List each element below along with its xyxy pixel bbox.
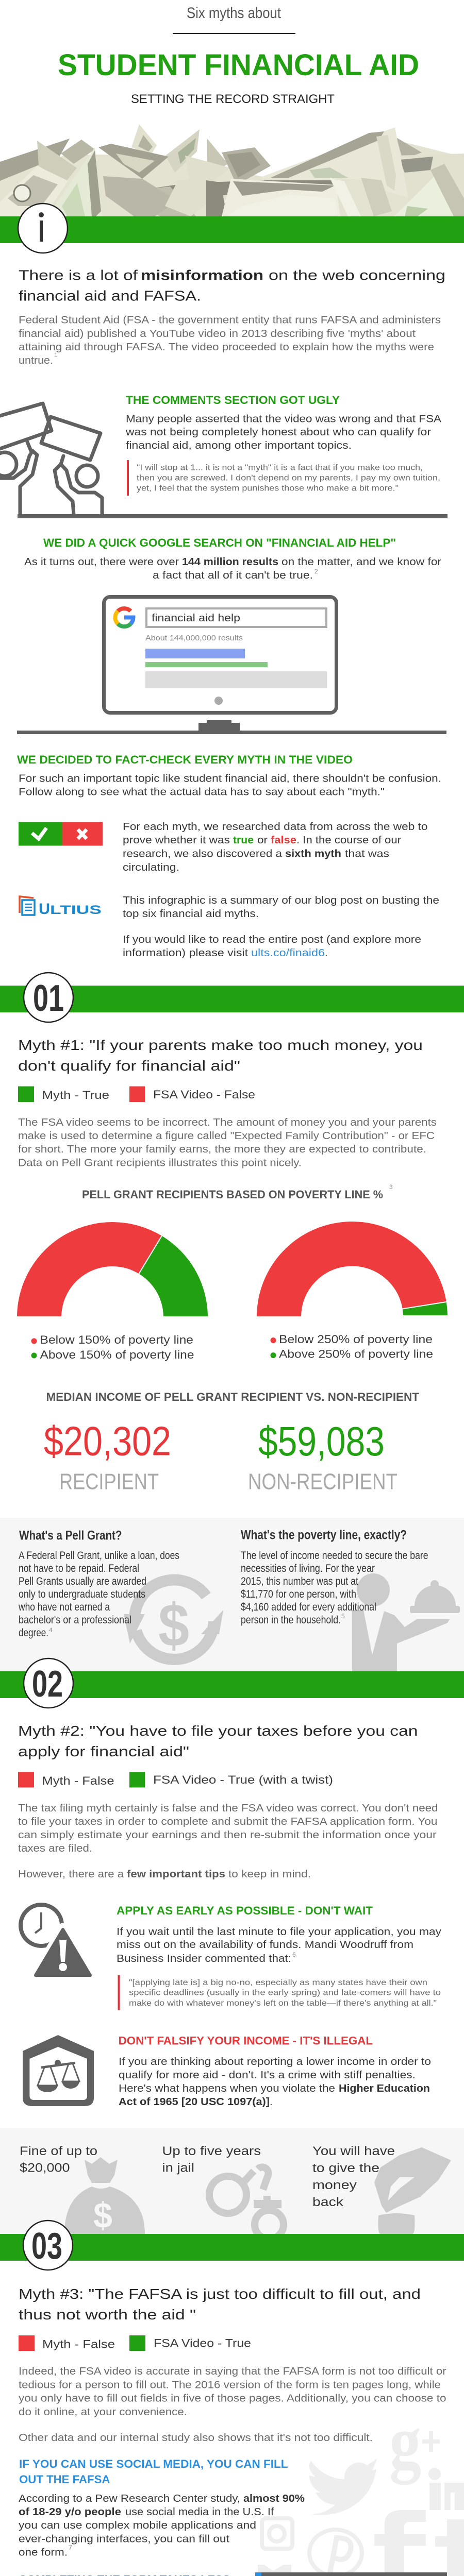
icon: dollar refresh [124,1580,223,1659]
icon: dollar refresh: $ [158,1591,189,1659]
fact-check section [17,753,441,798]
logo: Ultius: U [39,901,50,918]
icon: computer monitor with search results [17,597,446,734]
myth 3 heading: Myth #3: "The FAFSA is just too difficult to fill out, and [19,2286,421,2302]
callout: social media: one form. [19,2547,68,2558]
icon: computer monitor with search results: About 144,000,000 results [145,634,243,642]
median income comparison: NON-RECIPIENT [248,1469,397,1494]
myth 2 paragraph: can simply estimate your earnings and then re-submit the information once your [18,1829,437,1841]
true or false explanation: false [271,835,296,846]
google search section: 144 million results [182,556,278,568]
quote: Business Insider [118,1975,441,2010]
legend: Above 250% of poverty line [279,1348,433,1360]
myth 2 verdict legend: FSA Video - True (with a twist) [153,1773,333,1786]
tip: apply early: If you wait until the last minute to file your application, you may [117,1926,441,1938]
panel: form steps [255,2572,447,2576]
definition: pell grant: who have not earned a [18,1601,110,1613]
callout: social media: According to a Pew Research Center study, [19,2493,240,2504]
legend: Above 150% of poverty line [40,1348,194,1361]
intro paragraph: financial aid) published a YouTube video in 2013 describing five 'myths' about [19,328,416,340]
definition: pell grant: only to undergraduate students [19,1588,145,1600]
legend: Below 250% of poverty line [279,1333,433,1346]
definition: poverty line: 5 [341,1613,345,1620]
panel: definitions [0,1518,464,1671]
logo: Ultius [20,896,102,918]
true or false explanation: sixth myth [285,848,341,859]
tip: apply early: APPLY AS EARLY AS POSSIBLE - DON'T WAIT [117,1904,373,1917]
band: myth 2: 02 [32,1664,63,1705]
chart: below and above 250 percent [257,1222,448,1360]
definition: poverty line: person in the household. [241,1614,341,1626]
myth 1 heading: Myth #1: "If your parents make too much money, you [18,1037,423,1053]
comments section: was not being completely honest about who can qualify for [125,427,431,438]
median income comparison: $59,083 [258,1418,385,1464]
blog post note [123,895,439,959]
true or false explanation: true [233,835,254,846]
blog post note: top six financial aid myths. [123,908,259,920]
definition: pell grant: Pell Grants usually are awarded [19,1575,146,1587]
definition: pell grant: not have to be repaid. Federal [19,1563,139,1574]
definition: pell grant: What's a Pell Grant? [19,1528,122,1543]
quote: Business Insider: "[applying late is] a big no-no, especially as many states have their own [129,1978,427,1987]
myth 3 verdict legend: Myth - False [42,2338,115,2350]
tip: apply early: miss out on the availability of funds. Mandi Woodruff from [117,1939,413,1951]
intro paragraph: untrue. [19,355,53,366]
myth 1 heading: don't qualify for financial aid" [18,1058,240,1074]
comments section: Many people asserted that the video was wrong and that FSA [126,413,442,425]
true or false explanation: that was [345,848,389,859]
icon: computer monitor with search results: financial aid help [152,613,240,624]
true or false explanation: circulating. [123,862,179,873]
legend: Below 150% of poverty line [40,1333,193,1346]
quote: comment [127,460,440,496]
myth 2 paragraph: However, there are a [18,1869,124,1880]
myth 2 verdict legend: Myth - False [42,1774,114,1787]
intro heading: There is a lot of [19,267,138,283]
legend [31,1333,194,1361]
true or false explanation: . In the course of our [296,835,401,846]
quote: Business Insider: make do with whatever money's left on the table—if there's anything at all." [129,1999,437,2008]
blog post note: If you would like to read the entire post (and explore more [123,934,421,945]
callout: social media [19,2458,305,2558]
icon: handcuffs [209,2167,284,2239]
icon: clock and warning triangle [21,1905,93,1977]
penalty: repay: to give the [312,2161,379,2175]
myth 3 verdict legend [19,2335,251,2351]
illustration: pile of dollar bills [0,124,464,216]
definition: poverty line: $11,770 for one person, with [241,1588,356,1600]
band: myth 3: 03 [31,2226,62,2267]
myth 2 paragraph: to keep in mind. [228,1869,311,1880]
tip: don't falsify income: Act of 1965 [20 USC 1097(a)] [119,2096,270,2108]
band: intro [0,216,464,243]
header [58,5,419,106]
myth 3 paragraph [19,2366,446,2444]
quote: comment: yet, I feel that the system punishes those who make a bit more." [137,484,399,493]
callout: social media: 7 [69,2544,72,2551]
myth 1 verdict legend [18,1086,255,1102]
myth 3 paragraph: you only have to fill out fields in five of those pages. Additionally, you can choose to [19,2393,446,2404]
badge: info [18,204,68,253]
tip: don't falsify income: If you are thinking about reporting a lower income in order to [119,2056,431,2067]
intro heading: misinformation [141,267,263,283]
icon: courthouse shield with scales [23,2035,94,2106]
definition: poverty line: What's the poverty line, exactly? [241,1528,407,1543]
subtitle: SETTING THE RECORD STRAIGHT [131,92,335,106]
true or false explanation: or [257,835,268,846]
penalty: jail [162,2144,261,2175]
logo: Ultius: LTIUS [50,903,102,917]
definition: poverty line [241,1528,428,1626]
chart title: poverty line: 3 [389,1183,393,1191]
icon: true and false boxes [19,822,103,846]
callout: social media: almost 90% [243,2493,305,2504]
icon: google logo [115,608,134,626]
blog post note: . [325,947,328,959]
intro paragraph: attaining aid through FAFSA. The video proceeded to explain how the myths were [19,342,434,353]
myth 3 heading: thus not worth the aid " [19,2307,196,2323]
myth 3 paragraph: Indeed, the FSA video is accurate in saying that the FAFSA form is not too difficult or [19,2366,446,2377]
icons: social media watermark: g [389,2399,421,2485]
quote: comment: then you are screwed. I don't depend on my parents, I pay my own tuition, [137,474,440,482]
intro heading [19,267,445,304]
fact-check section: WE DECIDED TO FACT-CHECK EVERY MYTH IN THE VIDEO [17,753,353,766]
myth 2 paragraph: The tax filing myth certainly is false and the FSA video was correct. You don't need [18,1803,438,1814]
myth 3 paragraph: tedious for a person to fill out. The 2016 version of the form is ten pages long, while [19,2379,441,2391]
penalty: repay [312,2144,395,2209]
tip: don't falsify income: Here's what happens when you violate the [119,2083,335,2094]
google search section: 2 [314,568,318,575]
penalty: fine [20,2144,97,2175]
band: myth 2 [0,1658,464,1708]
panel: penalties [0,2128,464,2239]
google search section [24,536,441,581]
median income comparison: MEDIAN INCOME OF PELL GRANT RECIPIENT VS. NON-RECIPIENT [46,1391,420,1403]
tip: apply early: 6 [292,1951,296,1958]
tip: apply early: Business Insider commented that: [117,1953,291,1964]
blog post note: information) please visit [123,947,248,959]
chart title: poverty line: PELL GRANT RECIPIENTS BASED ON POVERTY LINE % [82,1188,383,1201]
fact-check section: For such an important topic like student financial aid, there shouldn't be confusion. [19,773,441,784]
google search section: WE DID A QUICK GOOGLE SEARCH ON "FINANCIAL AID HELP" [43,536,396,549]
myth 1 paragraph: The FSA video seems to be incorrect. The amount of money you and your parents [18,1117,437,1128]
callout: social media: IF YOU CAN USE SOCIAL MEDIA, YOU CAN FILL [19,2458,288,2470]
definition: pell grant [18,1528,179,1639]
penalty: repay: back [312,2195,344,2209]
definition: pell grant: A Federal Pell Grant, unlike a loan, does [19,1550,179,1562]
title: STUDENT FINANCIAL AID [58,48,419,82]
icon: protesters holding signs [0,403,448,518]
median income comparison: $20,302 [44,1418,171,1464]
definition: poverty line: $4,160 added for every additional [241,1601,376,1613]
icon: money bag [64,2157,145,2235]
kicker: six myths about: Six myths about [187,5,281,22]
definition: poverty line: 2015, this number was put at [241,1575,358,1587]
definition: poverty line: necessities of living. For the year [241,1563,375,1574]
fact-check section: Follow along to see what the actual data has to say about each "myth." [19,787,385,798]
myth 1 paragraph: for short. The more your family earns, the more they are expected to contribute. [18,1144,426,1155]
callout: social media: OUT THE FAFSA [19,2473,110,2486]
tip: don't falsify income: qualify for more aid - don't. It's a crime with stiff penalties. [119,2070,416,2081]
myth 2 heading: Myth #2: "You have to file your taxes before you can [18,1723,418,1739]
band: myth 3 [0,2221,464,2270]
median income comparison: RECIPIENT [59,1469,159,1494]
band: myth 1: 01 [33,978,64,1019]
penalty: jail: Up to five years [162,2144,261,2158]
quote: Business Insider: specific deadlines (usually in the early spring) and late-comers will have to [129,1989,441,1997]
callout: social media: you can use complex mobile applications and [19,2520,256,2531]
myth 1 verdict legend: FSA Video - False [153,1088,255,1101]
tip: don't falsify income: DON'T FALSIFY YOUR INCOME - IT'S ILLEGAL [119,2034,373,2047]
callout: social media: use social media in the U.S. If [125,2506,274,2518]
definition: poverty line: The level of income needed to secure the bare [241,1550,428,1562]
penalty: repay: You will have [312,2144,395,2158]
intro heading: financial aid and FAFSA. [19,287,201,304]
myth 3 paragraph: Other data and our internal study also shows that it's not too difficult. [19,2432,373,2444]
myth 3 verdict legend: FSA Video - True [154,2337,251,2349]
definition: pell grant: bachelor's or a professional [19,1614,131,1626]
quote: comment: "I will stop at 1... it is not a "myth" it is a fact that if you make too much, [137,464,423,472]
callout: social media: ever-changing interfaces, you can fill out [19,2534,229,2545]
myth 2 paragraph [18,1803,438,1880]
tip: apply early [117,1904,441,2010]
true or false explanation: For each myth, we researched data from across the web to [123,821,428,833]
myth 3 heading [19,2286,421,2323]
tip: don't falsify income [119,2034,431,2108]
intro paragraph [19,314,441,366]
intro paragraph: 1 [54,351,58,359]
penalty: fine: $20,000 [20,2161,70,2175]
chart: below and above 150 percent [17,1222,208,1361]
icons: social media watermark [258,2399,464,2576]
legend [270,1333,433,1360]
definition: pell grant: 4 [49,1626,53,1634]
myth 2 verdict legend [18,1772,333,1788]
intro paragraph: Federal Student Aid (FSA - the government entity that runs FAFSA and administers [19,314,441,326]
myth 2 heading [18,1723,418,1759]
icon: waiter with serving tray [352,1573,460,1671]
google search section: a fact that all of it can't be true. [153,570,313,581]
definition: pell grant: degree. [19,1627,48,1639]
true or false explanation [123,821,428,873]
intro heading: on the web concerning [269,267,445,283]
myth 3 paragraph: do it online, at your convenience. [19,2406,187,2418]
icon: money bag: $ [93,2195,112,2235]
myth 1 paragraph: Data on Pell Grant recipients illustrates this point nicely. [18,1157,302,1168]
band: myth 1 [0,973,464,1022]
myth 1 heading [18,1037,423,1074]
median income comparison [44,1391,420,1494]
myth 1 paragraph [18,1117,437,1168]
myth 2 paragraph: few important tips [127,1869,225,1880]
myth 1 paragraph: make is used to determine a figure called "Expected Family Contribution" - or EFC [18,1130,435,1142]
myth 1 verdict legend: Myth - True [42,1089,109,1101]
blog post note: ults.co/finaid6 [251,947,325,959]
myth 2 paragraph: to file your taxes in order to complete and submit the FAFSA application form. You [18,1816,437,1827]
true or false explanation: research, we also discovered a [123,848,283,859]
tip: don't falsify income: . [270,2096,273,2108]
comments section: THE COMMENTS SECTION GOT UGLY [126,394,340,406]
google search section: on the matter, and we know for [281,556,441,568]
blog post note: This infographic is a summary of our blog post on busting the [123,895,439,906]
myth 2 paragraph: taxes are filed. [18,1843,92,1854]
google search section: As it turns out, there were over [24,556,179,568]
comments section [125,394,442,496]
icon: hand giving coin [374,2147,451,2234]
tip: don't falsify income: Higher Education [339,2083,430,2094]
true or false explanation: prove whether it was [123,835,230,846]
myth 2 heading: apply for financial aid" [18,1743,189,1759]
penalty: repay: money [312,2178,357,2192]
comments section: financial aid, among other important topics. [126,440,352,451]
penalty: fine: Fine of up to [20,2144,97,2158]
penalty: jail: in jail [162,2161,194,2175]
callout: social media: of 18-29 y/o people [19,2506,121,2518]
